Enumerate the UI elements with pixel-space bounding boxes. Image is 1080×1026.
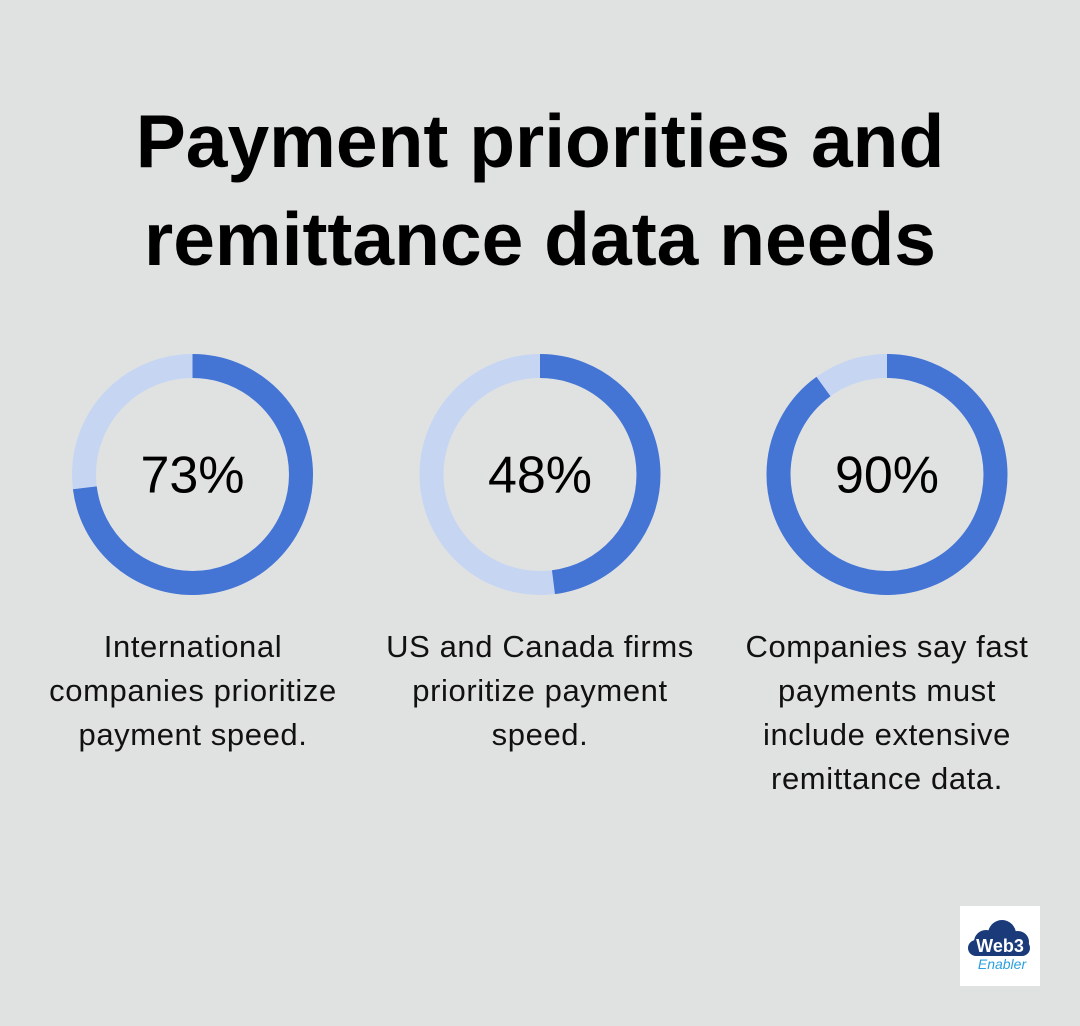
label 3: include extensive: [763, 717, 1011, 752]
donut: 90%: 90%: [835, 446, 939, 504]
label 2: [386, 629, 694, 752]
donut: 90%: [778, 366, 996, 583]
logo: Web3: [976, 936, 1024, 956]
donut: 73%: 73%: [140, 446, 245, 504]
title: remittance data needs: [144, 197, 936, 281]
label 2: US and Canada firms: [386, 629, 694, 664]
label 3: remittance data.: [771, 761, 1003, 796]
label 1: payment speed.: [78, 717, 308, 752]
label 1: International: [104, 629, 282, 664]
title: Payment priorities and: [136, 99, 944, 183]
title: [136, 99, 944, 281]
logo: Enabler: [978, 956, 1027, 972]
donut: 48%: [432, 366, 648, 583]
logo: [960, 906, 1040, 986]
label 3: [745, 629, 1029, 796]
label 2: speed.: [492, 717, 588, 752]
label 2: prioritize payment: [412, 673, 668, 708]
donut: 73%: [84, 366, 301, 583]
label 1: [49, 629, 337, 752]
label 1: companies prioritize: [49, 673, 337, 708]
label 3: Companies say fast: [745, 629, 1029, 664]
label 3: payments must: [778, 673, 996, 708]
donut: 48%: 48%: [488, 446, 592, 504]
